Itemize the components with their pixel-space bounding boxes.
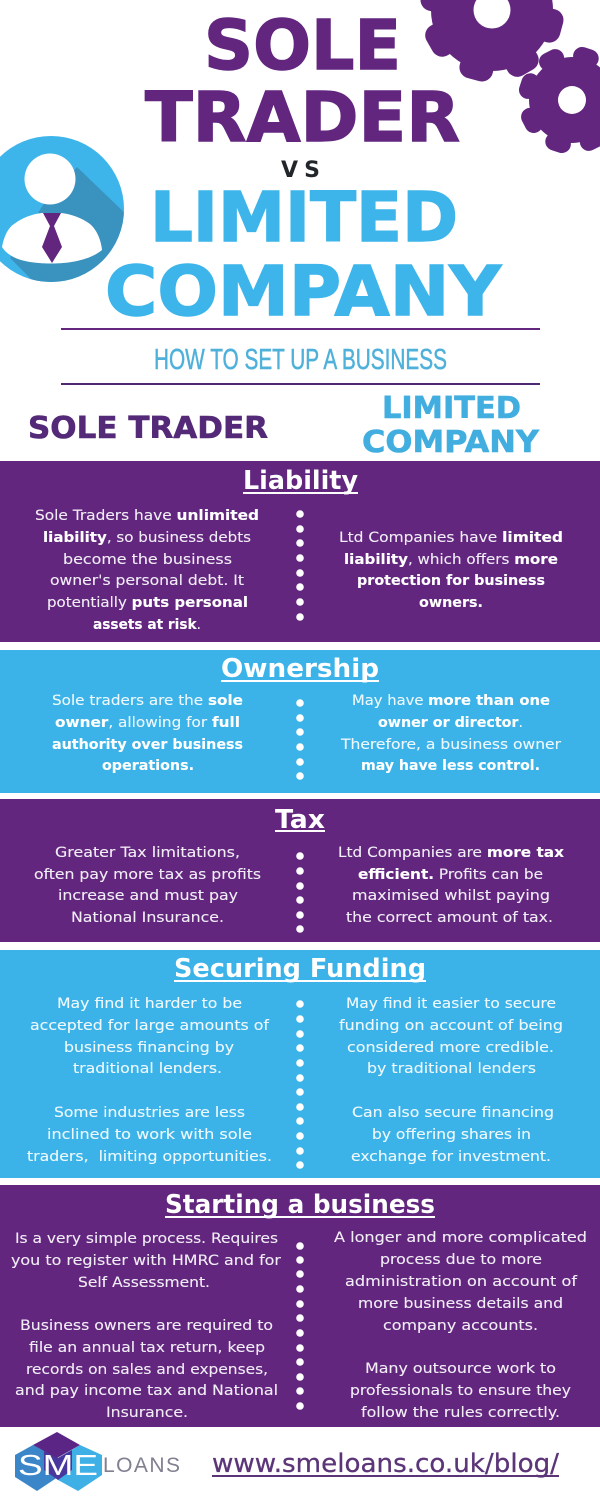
text: sole trader starting: Self Assessment. [78, 1275, 210, 1291]
text: sole trader tax: National Insurance. [71, 910, 224, 926]
text: sole trader ownership: authority over business [52, 737, 243, 753]
text: limited company starting: company accounts. [383, 1318, 538, 1334]
text: sole trader starting: you to register with HMRC and for [11, 1253, 281, 1269]
text: sole trader ownership: operations. [102, 758, 194, 774]
column heading: limited company [362, 391, 540, 460]
title: sole trader [145, 6, 460, 158]
text: sole trader starting: file an annual tax return, keep [29, 1340, 265, 1356]
panel: tax [0, 799, 600, 942]
text: sole trader funding: accepted for large amounts of [30, 1018, 270, 1034]
text: sole trader ownership [52, 693, 243, 774]
text: limited company funding: May find it easier to secure [346, 996, 556, 1012]
text: limited company starting: Many outsource work to [365, 1361, 556, 1377]
text: sole trader tax: Greater Tax limitations, [55, 845, 240, 861]
text: limited company starting: administration on account of [345, 1274, 578, 1290]
icon: business person [0, 136, 130, 290]
text: sole trader starting [11, 1231, 281, 1421]
title: sole trader: SOLE [204, 6, 401, 86]
text: sole trader funding [27, 996, 272, 1165]
text: limited company funding [339, 996, 563, 1165]
column heading: sole trader: SOLE TRADER [28, 411, 268, 446]
text: limited company starting [334, 1230, 587, 1421]
text: limited company ownership: May have more than one [352, 693, 550, 709]
text: limited company ownership: owner or director. [378, 715, 523, 731]
text: sole trader funding: traders, limiting opportunities. [27, 1149, 272, 1165]
text: limited company ownership: may have less control. [361, 758, 540, 774]
text: sole trader liability: assets at risk. [93, 617, 201, 633]
dotted divider [296, 510, 304, 621]
heading: securing funding: Securing Funding [174, 954, 426, 984]
title: limited company [105, 178, 502, 332]
text: sole trader liability [35, 508, 259, 633]
text: limited company liability: Ltd Companies have limited [339, 530, 563, 546]
text: limited company tax: Ltd Companies are more tax [338, 845, 565, 861]
panel: ownership [0, 650, 600, 793]
panel: liability [0, 461, 600, 642]
text: sole trader funding: inclined to work with sole [47, 1127, 252, 1143]
text: sole trader funding: business financing by [64, 1040, 234, 1056]
text: limited company tax [338, 845, 565, 926]
subtitle with rules: HOW TO SET UP A BUSINESS [154, 344, 447, 376]
text: sole trader liability: become the business [63, 552, 232, 568]
text: limited company tax: efficient. Profits can be [358, 867, 543, 883]
text: limited company ownership [340, 693, 561, 774]
heading: tax: Tax [275, 805, 325, 835]
text: limited company tax: the correct amount of tax. [346, 910, 553, 926]
link: website url: www.smeloans.co.uk/blog/ [212, 1449, 559, 1479]
text: limited company funding: considered more credible. [347, 1040, 554, 1056]
text: limited company funding: Can also secure financing [352, 1105, 554, 1121]
text: sole trader ownership: Sole traders are the sole [52, 693, 243, 709]
logo: sme loans [15, 1432, 180, 1491]
text: limited company liability [339, 530, 563, 611]
text: sole trader ownership: owner, allowing for full [55, 715, 240, 731]
logo: sme loans: LOANS [103, 1454, 180, 1477]
text: limited company ownership: Therefore, a business owner [340, 737, 561, 753]
text: sole trader liability: potentially puts personal [47, 595, 248, 611]
text: sole trader starting: records on sales and expenses, [26, 1362, 268, 1378]
text: sole trader tax: increase and must pay [58, 888, 238, 904]
text: limited company liability: owners. [419, 595, 483, 611]
text: limited company tax: maximised whilst paying [352, 888, 550, 904]
heading: starting a business: Starting a business [165, 1190, 435, 1220]
text: sole trader funding: May find it harder to be [57, 996, 242, 1012]
text: sole trader starting: and pay income tax and National [15, 1383, 278, 1399]
text: sole trader starting: Insurance. [106, 1405, 188, 1421]
text: sole trader tax [34, 845, 261, 926]
text: sole trader liability: liability, so business debts [43, 530, 251, 546]
text: sole trader starting: Business owners are required to [20, 1318, 273, 1334]
text: sole trader starting: Is a very simple process. Requires [15, 1231, 278, 1247]
column heading: limited company: COMPANY [362, 425, 540, 460]
text: limited company liability: liability, which offers more [344, 552, 558, 568]
text: sole trader liability: owner's personal debt. It [50, 573, 244, 589]
heading: ownership: Ownership [221, 654, 379, 684]
text: limited company funding: by offering shares in [372, 1127, 531, 1143]
text: limited company starting: process due to more [380, 1252, 542, 1268]
column heading: limited company: LIMITED [382, 391, 521, 426]
text: limited company funding: by traditional lenders [367, 1061, 536, 1077]
title: sole trader: TRADER [145, 78, 460, 158]
title: vs: VS [281, 158, 320, 183]
text: limited company starting: follow the rules correctly. [361, 1405, 560, 1421]
dotted divider [296, 1000, 304, 1169]
text: sole trader funding: traditional lenders. [73, 1061, 222, 1077]
panel: securing funding [0, 950, 600, 1178]
logo: sme loans: SME [18, 1450, 98, 1482]
heading: liability: Liability [243, 466, 358, 496]
text: limited company starting: professionals to ensure they [350, 1383, 571, 1399]
icon: large gear [418, 0, 566, 84]
text: sole trader funding: Some industries are less [54, 1105, 245, 1121]
dotted divider [296, 1242, 304, 1410]
text: limited company funding: exchange for investment. [351, 1149, 551, 1165]
dotted divider [296, 852, 304, 933]
text: limited company liability: protection for business [357, 573, 545, 589]
panel: starting a business [0, 1185, 600, 1427]
title: limited company: COMPANY [105, 252, 502, 332]
text: limited company starting: more business details and [358, 1296, 563, 1312]
title: limited company: LIMITED [150, 178, 458, 258]
text: limited company funding: funding on account of being [339, 1018, 563, 1034]
text: sole trader tax: often pay more tax as profits [34, 867, 261, 883]
dotted divider [296, 699, 304, 780]
text: limited company starting: A longer and more complicated [334, 1230, 587, 1246]
icon: small gear [517, 45, 600, 155]
text: sole trader liability: Sole Traders have unlimited [35, 508, 259, 524]
